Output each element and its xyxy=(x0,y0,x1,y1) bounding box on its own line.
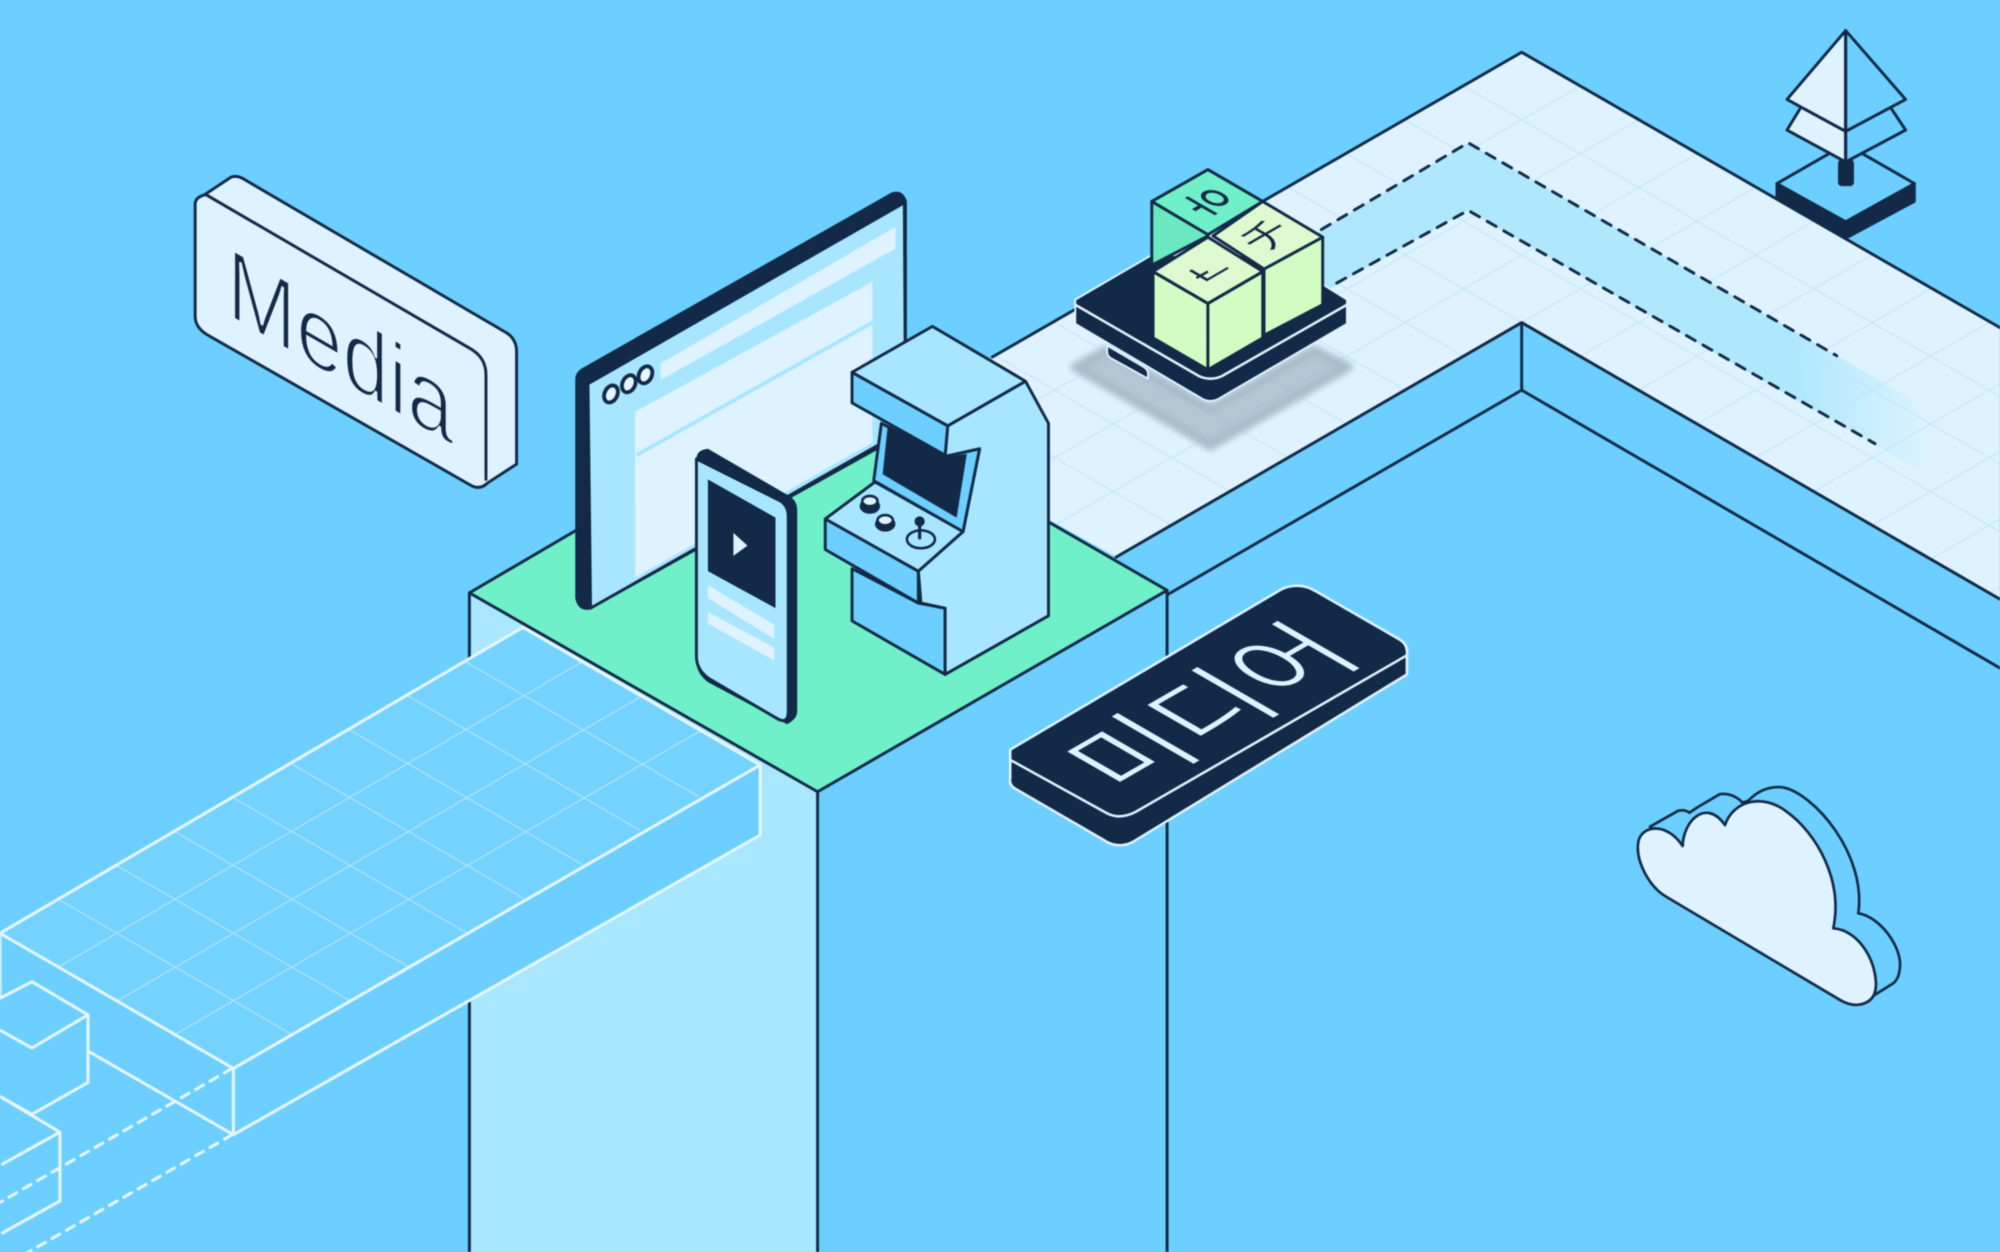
window content panel xyxy=(635,282,872,578)
pillar lines xyxy=(469,590,1167,1252)
arcade lower front xyxy=(852,569,945,674)
cloud back xyxy=(1650,787,1900,1000)
arcade joystick xyxy=(907,516,935,548)
road channel xyxy=(1314,143,1952,490)
tree base xyxy=(1777,184,1915,238)
Media label: Media xyxy=(227,226,454,468)
browser window xyxy=(575,192,907,610)
letter cubes on tray xyxy=(1075,170,1347,401)
phone xyxy=(696,449,797,724)
tree top layer xyxy=(1787,31,1846,131)
cube letters: ㅎ xyxy=(1160,171,1263,230)
arcade control panel xyxy=(825,519,918,603)
arcade screen frame xyxy=(874,423,980,532)
tree xyxy=(1777,31,1915,238)
letter cubes on tray: チ xyxy=(1225,212,1309,261)
pillar left face xyxy=(469,593,818,1252)
window dots xyxy=(601,364,655,405)
cloud xyxy=(1638,787,1900,1005)
front cube xyxy=(1153,272,1208,370)
ghost cubes and dashes xyxy=(0,982,232,1252)
arcade buttons xyxy=(860,496,895,532)
arcade body xyxy=(918,381,1048,674)
arcade marquee xyxy=(852,372,948,455)
Korean media label xyxy=(1010,586,1407,845)
play icon xyxy=(733,533,747,556)
tray xyxy=(1075,255,1347,401)
tree trunk xyxy=(1838,159,1854,186)
green cube xyxy=(1152,201,1208,265)
letter cubes on tray: ㄴ xyxy=(1169,247,1250,294)
phone screen xyxy=(708,479,776,608)
cloud front xyxy=(1638,801,1876,1005)
bridge sides xyxy=(233,765,760,1135)
green platform xyxy=(469,389,1167,792)
phone text bars xyxy=(708,585,774,639)
tree lower layer xyxy=(1787,107,1846,162)
right cube xyxy=(1264,237,1323,335)
Korean media label: 미디어 xyxy=(1042,610,1384,807)
arcade machine xyxy=(825,326,1048,674)
tray tab xyxy=(1107,346,1148,379)
tray shadow xyxy=(1075,349,1348,446)
ghost bridge xyxy=(0,627,760,1135)
road walkway xyxy=(990,50,2000,670)
Media label xyxy=(195,176,517,487)
arcade screen xyxy=(883,426,967,518)
bridge top xyxy=(0,627,760,1068)
